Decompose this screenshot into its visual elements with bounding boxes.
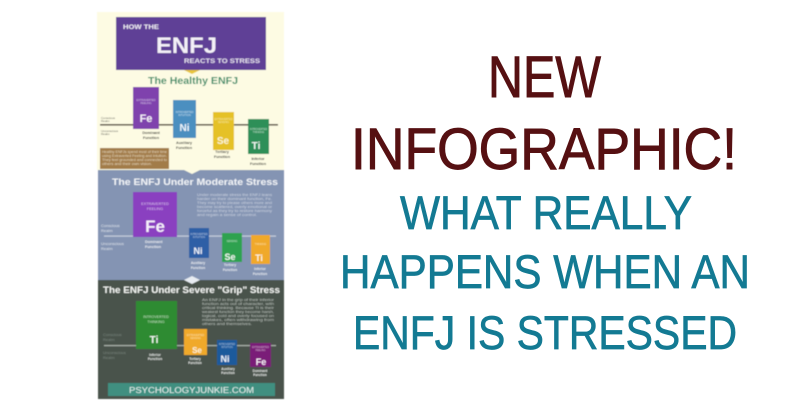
label: tertiary function bbox=[223, 263, 237, 272]
label: inferior function: Function bbox=[250, 162, 267, 166]
axis labels bbox=[101, 116, 119, 136]
text block: grip description: others and themselves. bbox=[202, 322, 252, 326]
axis labels: Realm bbox=[101, 228, 113, 233]
function card: Se: Se bbox=[217, 136, 230, 147]
axis labels: Conscious bbox=[101, 223, 120, 228]
function card: Ti: THINKING bbox=[253, 131, 264, 134]
function card: Ni bbox=[189, 228, 209, 258]
axis labels bbox=[103, 332, 126, 360]
text block: grip description: function acts out of character, with bbox=[202, 302, 274, 306]
subheadline: what really happens bbox=[340, 186, 750, 359]
label: dominant function: Dominant bbox=[142, 131, 160, 135]
function card: Fe: EXTRAVERTED bbox=[252, 346, 269, 349]
function card: Se bbox=[184, 329, 207, 355]
function card: Fe bbox=[133, 87, 159, 129]
axis labels: Realm bbox=[101, 246, 113, 251]
text block: grip description: An ENFJ in the grip of their inferior bbox=[202, 298, 275, 302]
function card: Ti: Ti bbox=[255, 253, 263, 263]
label: auxiliary function: Function bbox=[176, 146, 193, 150]
label: inferior function: Function bbox=[148, 357, 162, 361]
axis labels: Unconscious bbox=[101, 129, 119, 133]
label: auxiliary function: Function bbox=[221, 371, 235, 375]
label: tertiary function: Tertiary bbox=[189, 357, 201, 361]
axis labels: Realm bbox=[101, 132, 110, 136]
text block: grip description: critical thinking. Because Ti is their bbox=[202, 306, 275, 310]
label: tertiary function: Tertiary bbox=[215, 150, 230, 154]
text block: healthy description: Healthy ENFJs spend most of their time bbox=[102, 150, 167, 154]
label: tertiary function bbox=[214, 150, 231, 159]
function card: Se: SENSING bbox=[190, 337, 201, 340]
label: auxiliary function: Function bbox=[191, 266, 205, 270]
text block: grip description: mistakes, often withdrawing from bbox=[202, 318, 274, 322]
label: inferior function bbox=[148, 353, 162, 361]
text block: grip description: logical, cold and overly focused on bbox=[202, 314, 274, 318]
label: auxiliary function: Auxiliary bbox=[221, 367, 235, 371]
label: tertiary function: Function bbox=[188, 361, 202, 365]
label: auxiliary function bbox=[176, 141, 193, 150]
function card: Ti: Ti bbox=[252, 141, 261, 152]
label: inferior function bbox=[253, 267, 267, 276]
axis labels: Realm bbox=[103, 355, 115, 360]
function card: Fe: Fe bbox=[145, 217, 165, 236]
label: dominant function bbox=[142, 131, 160, 140]
function card: Ti: INTROVERTED bbox=[143, 315, 169, 319]
function card: Se bbox=[222, 233, 242, 262]
panel: moderate stress bbox=[98, 170, 284, 280]
text block: moderate description bbox=[197, 193, 273, 217]
label: tertiary function: Function bbox=[223, 268, 237, 272]
function card: Ti bbox=[248, 119, 269, 154]
axis labels: Realm bbox=[103, 337, 115, 342]
function card: Se: Se bbox=[192, 346, 202, 355]
text block: healthy description: using Extraverted Feeling and Intuition. bbox=[102, 154, 167, 158]
function card: Fe bbox=[250, 343, 271, 367]
label: dominant function bbox=[253, 369, 268, 377]
function card: Ti: Ti bbox=[150, 335, 159, 346]
footer banner: PSYCHOLOGYJUNKIE.COM bbox=[129, 385, 254, 395]
label: tertiary function: Function bbox=[214, 155, 231, 159]
subheadline: what really happens: HAPPENS WHEN AN bbox=[340, 245, 750, 298]
connector arrow bbox=[184, 276, 200, 284]
subheadline: what really happens: WHAT REALLY bbox=[400, 186, 692, 239]
header banner bbox=[116, 17, 266, 74]
function card: Ni: INTUITION bbox=[193, 236, 205, 239]
label: dominant function: Dominant bbox=[253, 369, 268, 373]
function card: Fe: EXTRAVERTED bbox=[141, 202, 169, 206]
label: auxiliary function bbox=[221, 367, 235, 375]
function card: Ni: INTUITION bbox=[178, 114, 191, 117]
function card: Ni: Ni bbox=[180, 123, 190, 134]
axis labels bbox=[101, 223, 124, 251]
label: dominant function: Function bbox=[145, 245, 162, 249]
axis labels: Conscious bbox=[103, 332, 122, 337]
axis labels: Realm bbox=[101, 119, 110, 123]
label: auxiliary function: Auxiliary bbox=[191, 261, 205, 265]
headline: new infographic: NEW bbox=[488, 45, 601, 110]
heading: grip stress: The ENFJ Under Severe "Grip" Stress bbox=[103, 285, 280, 295]
text block: moderate description: forceful as they try to restore harmony bbox=[197, 209, 272, 213]
subheadline: what really happens: ENFJ IS STRESSED bbox=[353, 306, 737, 359]
function card: Fe: FEELING bbox=[147, 207, 163, 211]
function card: Ti: THINKING bbox=[255, 243, 266, 246]
function card: Se: Se bbox=[224, 252, 236, 262]
function card: Fe: Fe bbox=[256, 357, 266, 367]
label: inferior function: Function bbox=[253, 272, 267, 276]
function card: Se: SENSING bbox=[218, 121, 229, 124]
function card: Fe: EXTRAVERTED bbox=[137, 98, 156, 102]
heading: The Healthy ENFJ: The Healthy ENFJ bbox=[148, 75, 238, 87]
text block: healthy description bbox=[100, 148, 169, 169]
function card: Ni: INTROVERTED bbox=[176, 111, 194, 114]
text block: moderate description: They may try to please others more and bbox=[197, 201, 272, 205]
text block: moderate description: harder on their dominant function, Fe. bbox=[197, 197, 272, 201]
text block: grip description: weakest function they become harsh, bbox=[202, 310, 274, 314]
label: auxiliary function: Auxiliary bbox=[176, 141, 193, 145]
axis line bbox=[100, 124, 278, 126]
function card: Se: SENSING bbox=[227, 240, 238, 243]
label: tertiary function: Tertiary bbox=[224, 263, 236, 267]
text block: moderate description: and regain a sense of control. bbox=[197, 213, 257, 217]
function card: Ni: Ni bbox=[194, 246, 202, 256]
label: inferior function bbox=[250, 157, 267, 166]
axis labels: Unconscious bbox=[101, 241, 124, 246]
axis line bbox=[104, 345, 276, 346]
function card: Ti bbox=[251, 235, 270, 264]
text block: healthy description: others and their own vision. bbox=[102, 162, 152, 166]
function card: Se: EXTRAVERTED bbox=[214, 118, 233, 121]
headline: new infographic bbox=[351, 45, 737, 182]
axis labels: Unconscious bbox=[103, 350, 126, 355]
connector arrow bbox=[184, 170, 200, 174]
function card: Se bbox=[213, 112, 234, 150]
function card: Se: EXTRAVERTED bbox=[187, 334, 204, 337]
label: auxiliary function bbox=[191, 261, 205, 270]
function card: Fe bbox=[133, 192, 177, 237]
function card: Fe: FEELING bbox=[140, 101, 152, 105]
text block: moderate description: become scattered, overly emotional or bbox=[197, 205, 273, 209]
infographic thumbnail bbox=[97, 12, 284, 399]
function card: Fe: Fe bbox=[140, 113, 152, 125]
header banner: ENFJ bbox=[156, 33, 217, 58]
label: inferior function: Inferior bbox=[149, 353, 162, 357]
label: dominant function: Function bbox=[253, 373, 267, 377]
label: dominant function: Function bbox=[143, 136, 160, 140]
label: inferior function: Inferior bbox=[251, 157, 265, 161]
function card: Ni: INTUITION bbox=[221, 347, 233, 349]
function card: Ni: INTROVERTED bbox=[190, 233, 208, 236]
text block: grip description bbox=[202, 298, 275, 326]
text block: moderate description: Under moderate stress the ENFJ leans bbox=[197, 193, 272, 197]
header banner: HOW THE bbox=[123, 24, 160, 31]
axis labels: Conscious bbox=[101, 116, 116, 120]
panel: severe grip stress bbox=[98, 276, 284, 399]
function card: Ti: INTROVERTED bbox=[250, 128, 267, 131]
axis line bbox=[104, 236, 276, 237]
footer banner bbox=[108, 383, 275, 396]
function card: Ni: INTROVERTED bbox=[219, 344, 236, 346]
text block: healthy description: They feel grounded and connected to bbox=[102, 158, 167, 162]
heading: moderate stress: The ENFJ Under Moderate Stress bbox=[112, 177, 278, 187]
label: inferior function: Inferior bbox=[254, 267, 267, 271]
label: dominant function bbox=[145, 240, 163, 249]
label: dominant function: Dominant bbox=[145, 240, 163, 244]
function card: Ni bbox=[173, 100, 196, 138]
function card: Ni bbox=[217, 340, 237, 365]
function card: Fe: FEELING bbox=[256, 350, 266, 352]
header banner: REACTS TO STRESS bbox=[184, 58, 261, 65]
label: tertiary function bbox=[188, 357, 202, 365]
headline: new infographic: INFOGRAPHIC! bbox=[351, 117, 737, 182]
function card: Ni: Ni bbox=[220, 354, 230, 364]
function card: Ti bbox=[136, 301, 177, 349]
panel: the healthy ENFJ bbox=[97, 12, 284, 170]
function card: Ti: THINKING bbox=[147, 320, 165, 324]
